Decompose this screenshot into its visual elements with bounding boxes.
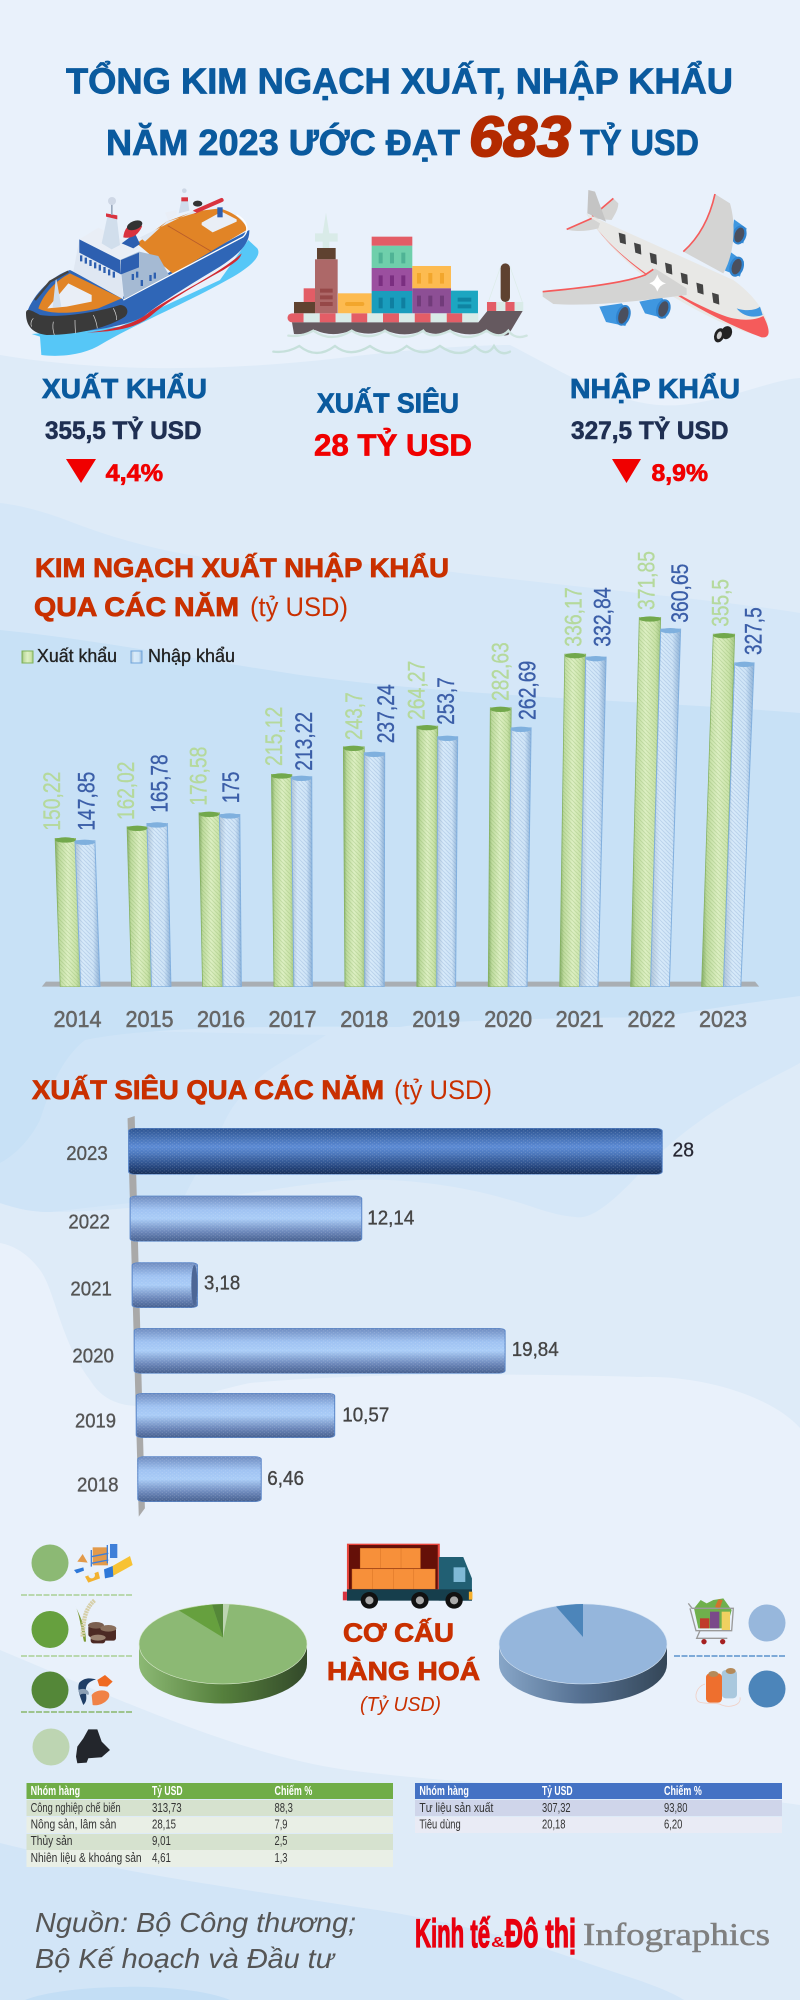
- legend: Nhập khẩu: [148, 646, 235, 666]
- data labels: exports: 215,12: [261, 707, 288, 766]
- data labels: imports: 213,22: [291, 712, 318, 771]
- table: import categories: Tư liệu sản xuất: [419, 1801, 494, 1815]
- value labels: 19,84: [512, 1339, 559, 1361]
- data labels: imports: 360,65: [667, 564, 694, 623]
- source note: [35, 1907, 356, 1974]
- year axis labels: 2022: [628, 1006, 676, 1032]
- heading: goods structure: CƠ CẤU: [343, 1618, 454, 1648]
- heading: trade by year: [34, 552, 449, 622]
- pie chart: exports: [139, 1604, 307, 1704]
- table: export categories: 4,61: [152, 1851, 171, 1865]
- data labels: exports: 371,85: [634, 551, 661, 610]
- legend: [22, 646, 235, 666]
- source note: Bộ Kế hoạch và Đầu tư: [35, 1943, 336, 1974]
- category labels: [66, 1143, 118, 1497]
- logo: Đô thị: [505, 1912, 576, 1956]
- data labels: imports: 327,5: [741, 607, 768, 655]
- table: export categories: Công nghiệp chế biến: [31, 1801, 121, 1815]
- table: import categories: Tiêu dùng: [419, 1818, 461, 1832]
- table: export categories: 2,5: [274, 1834, 288, 1848]
- pie chart: imports: [499, 1604, 667, 1704]
- icon: thread spools: [696, 1668, 740, 1706]
- year axis labels: 2014: [54, 1006, 102, 1032]
- data labels: imports: 332,84: [590, 587, 617, 647]
- stat: xuất khẩu: 355,5 TỶ USD: [45, 415, 202, 445]
- year axis labels: [54, 1006, 747, 1032]
- title: NĂM 2023 ƯỚC ĐẠT: [106, 121, 460, 163]
- table: export categories: [26, 1783, 393, 1867]
- data labels: imports: 262,69: [515, 661, 542, 720]
- heading: trade by year: (tỷ USD): [250, 592, 348, 622]
- logo: &: [491, 1934, 505, 1951]
- stat: xuất siêu: [314, 388, 472, 463]
- table: export categories: Nhóm hàng: [31, 1784, 80, 1798]
- table: export categories: Nông sản, lâm sản: [31, 1818, 116, 1832]
- icon: icebreaker ship: [26, 188, 258, 356]
- data labels: imports: 165,78: [146, 754, 173, 813]
- logo: Kinh tế: [415, 1912, 490, 1956]
- table: import categories: 307,32: [542, 1801, 571, 1815]
- heading: trade by year: QUA CÁC NĂM: [34, 591, 239, 622]
- icon: rice and logs: [75, 1600, 116, 1643]
- year axis labels: 2017: [268, 1006, 316, 1032]
- value labels: 12,14: [367, 1207, 414, 1229]
- category labels: 2023: [66, 1143, 108, 1165]
- stat: xuất siêu: XUẤT SIÊU: [317, 388, 459, 419]
- category labels: 2022: [68, 1211, 110, 1233]
- bar chart: exports and imports 2014-2023: [39, 551, 768, 1032]
- heading: trade surplus by year: XUẤT SIÊU QUA CÁC NĂM: [32, 1074, 384, 1105]
- heading: goods structure: [327, 1618, 480, 1716]
- table: import categories: 6,20: [664, 1818, 682, 1832]
- logo: Infographics: [583, 1916, 770, 1952]
- table: export categories: 9,01: [152, 1834, 171, 1848]
- title: [66, 58, 733, 169]
- stat: xuất khẩu: XUẤT KHẨU: [42, 373, 207, 404]
- year axis labels: 2015: [126, 1006, 174, 1032]
- data labels: imports: 147,85: [73, 772, 100, 831]
- table: export categories: Thủy sản: [31, 1834, 72, 1848]
- table: import categories: Chiếm %: [664, 1784, 702, 1798]
- icon: coal: [76, 1729, 110, 1763]
- table: import categories: 93,80: [664, 1801, 688, 1815]
- stat: xuất siêu: 28 TỶ USD: [314, 428, 472, 463]
- table: export categories: Chiếm %: [274, 1784, 312, 1798]
- data labels: exports: 282,63: [488, 642, 515, 701]
- data labels: imports: [73, 564, 768, 831]
- category labels: 2019: [75, 1411, 116, 1433]
- table: import categories: Nhóm hàng: [419, 1784, 469, 1798]
- data labels: exports: 176,58: [186, 747, 213, 806]
- value labels: 10,57: [342, 1405, 389, 1427]
- icon: seafood: [78, 1675, 113, 1705]
- title: TỶ USD: [580, 122, 699, 163]
- bar chart: trade surplus: [66, 1116, 694, 1517]
- value labels: 3,18: [204, 1272, 240, 1294]
- icon: logistics: [74, 1544, 133, 1583]
- category labels: 2021: [70, 1279, 112, 1301]
- data labels: imports: 253,7: [433, 677, 460, 725]
- table: export categories: 7,9: [274, 1818, 288, 1832]
- stat: nhập khẩu: 8,9%: [652, 460, 708, 487]
- title: 683: [469, 105, 571, 169]
- year axis labels: 2021: [556, 1006, 604, 1032]
- value labels: [204, 1140, 694, 1490]
- data labels: exports: 355,5: [708, 579, 735, 627]
- year axis labels: 2020: [484, 1006, 532, 1032]
- data labels: exports: 336,17: [561, 587, 588, 647]
- legend: export categories: [21, 1544, 133, 1766]
- icon: container ship: [273, 213, 527, 353]
- stat: nhập khẩu: [570, 373, 740, 487]
- logo: [415, 1912, 770, 1956]
- icon: shopping cart: [688, 1598, 733, 1644]
- heading: goods structure: HÀNG HOÁ: [327, 1656, 480, 1686]
- heading: trade by year: KIM NGẠCH XUẤT NHẬP KHẨU: [35, 552, 449, 583]
- data labels: exports: 243,7: [341, 692, 368, 740]
- category labels: 2020: [72, 1346, 114, 1368]
- data labels: imports: 175: [218, 772, 245, 803]
- year axis labels: 2023: [699, 1006, 747, 1032]
- year axis labels: 2019: [412, 1006, 460, 1032]
- table: export categories: Nhiên liệu & khoáng sản: [31, 1851, 142, 1865]
- heading: goods structure: (Tỷ USD): [360, 1694, 441, 1716]
- value labels: 28: [672, 1140, 694, 1162]
- data labels: imports: 237,24: [373, 684, 400, 743]
- table: import categories: Tỷ USD: [542, 1784, 573, 1798]
- legend: import categories: [674, 1604, 786, 1708]
- data labels: exports: 162,02: [113, 762, 140, 820]
- heading: trade surplus by year: (tỷ USD): [394, 1075, 492, 1105]
- table: export categories: 28,15: [152, 1818, 176, 1832]
- icon: delivery truck: [343, 1544, 472, 1609]
- title: TỔNG KIM NGẠCH XUẤT, NHẬP KHẨU: [66, 58, 733, 102]
- stat: xuất khẩu: 4,4%: [106, 460, 163, 487]
- category labels: 2018: [77, 1475, 118, 1497]
- table: export categories: Tỷ USD: [152, 1784, 183, 1798]
- table: import categories: 20,18: [542, 1818, 566, 1832]
- year axis labels: 2016: [197, 1006, 245, 1032]
- icon: airplane: [543, 190, 769, 344]
- data labels: exports: 150,22: [39, 772, 66, 831]
- stat: nhập khẩu: NHẬP KHẨU: [570, 373, 740, 404]
- table: export categories: 313,73: [152, 1801, 182, 1815]
- data labels: exports: 264,27: [404, 661, 430, 720]
- year axis labels: 2018: [340, 1006, 388, 1032]
- data labels: exports: [39, 551, 735, 831]
- table: export categories: 88,3: [274, 1801, 293, 1815]
- table: import categories: [415, 1783, 782, 1833]
- table: export categories: 1,3: [274, 1851, 288, 1865]
- value labels: 6,46: [267, 1468, 304, 1490]
- stat: xuất khẩu: [42, 373, 207, 487]
- source note: Nguồn: Bộ Công thương;: [35, 1907, 356, 1938]
- stat: nhập khẩu: 327,5 TỶ USD: [571, 415, 728, 445]
- legend: Xuất khẩu: [37, 646, 117, 666]
